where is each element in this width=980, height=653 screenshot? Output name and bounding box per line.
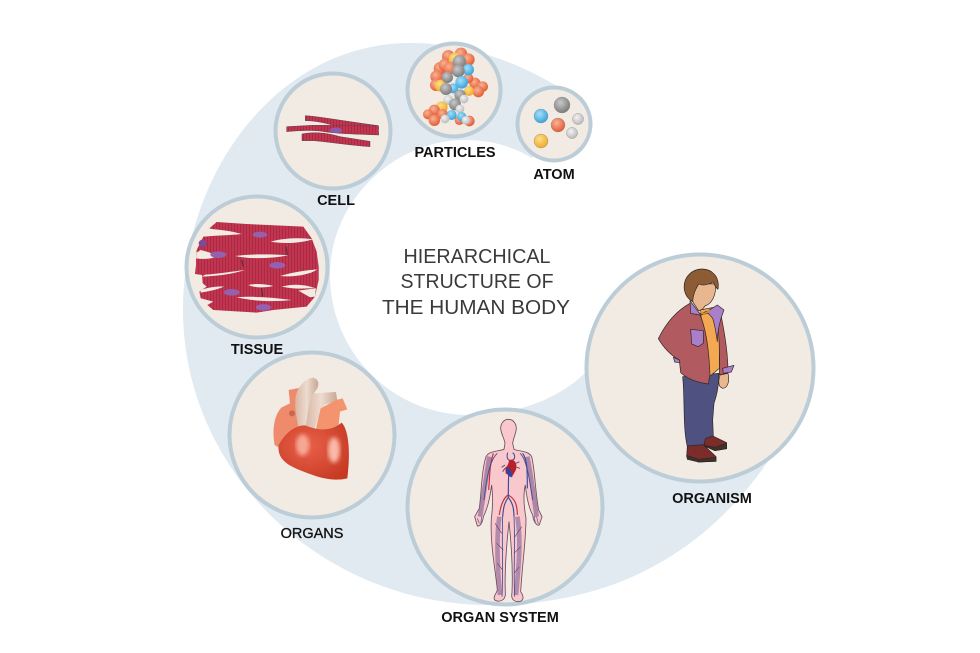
icon: muscle cell [287,116,379,147]
panel: tissue [186,196,328,338]
icon: muscle tissue [195,222,319,313]
panel: organs [230,352,394,518]
background spiral band [183,43,778,605]
label: organism: ORGANISM [672,491,752,507]
icon: molecule [423,48,488,126]
title: HIERARCHICAL [404,245,550,268]
icon: atom spheres [534,97,584,148]
jacket [658,303,710,384]
panel: organ system [408,410,602,604]
label: atom: ATOM [533,167,575,183]
icon: heart [274,378,349,480]
head [691,283,716,311]
title [382,245,570,319]
title: STRUCTURE OF [400,270,554,293]
label: organ system: ORGAN SYSTEM [441,610,559,626]
legs [683,373,719,447]
label: particles: PARTICLES [414,145,496,161]
label: cell: CELL [317,193,355,209]
shirt [700,307,719,377]
panel: atom [518,88,590,160]
vessels [477,453,538,597]
icon: boy figure [658,269,734,462]
icon: circulatory system [475,419,542,602]
panel: organism [586,254,814,482]
label: organs: ORGANS [281,526,343,542]
title: THE HUMAN BODY [382,296,570,319]
panel: cell [276,74,390,188]
label: tissue: TISSUE [231,342,284,358]
panel: particles [408,44,500,136]
